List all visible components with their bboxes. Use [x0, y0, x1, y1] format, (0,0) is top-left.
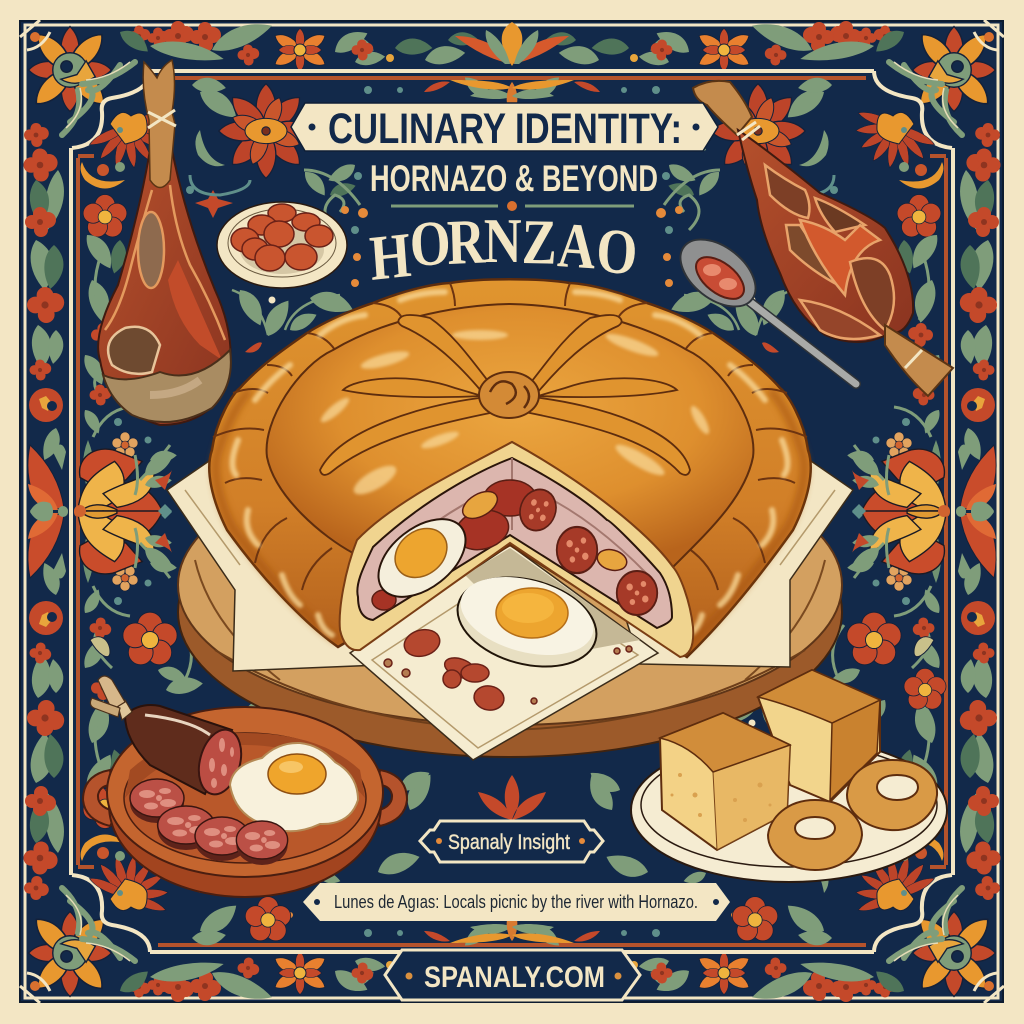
title banner: CULINARY IDENTITY: — [328, 105, 682, 153]
chorizo slices — [130, 779, 288, 865]
serving spoon with chorizo — [668, 226, 856, 384]
plate of chorizo slices — [217, 202, 347, 288]
fact banner — [303, 883, 730, 921]
halved egg on paper — [448, 563, 606, 681]
sausage slices in filling — [372, 480, 657, 615]
subtitle divider — [391, 201, 634, 211]
chorizo sausage — [90, 676, 248, 799]
pastry knot — [479, 372, 539, 418]
right cured ham — [693, 81, 953, 396]
pastry rings — [768, 760, 937, 870]
wooden board — [178, 445, 842, 757]
plate of bread and pastries — [631, 670, 947, 882]
main heading: HORNZAO — [367, 205, 639, 294]
pie crust rim — [209, 279, 811, 657]
parchment paper — [167, 450, 853, 760]
chorizo crumbs on paper — [384, 626, 632, 712]
pastry ridges — [320, 315, 690, 475]
clay dish with chorizo and fried egg — [83, 676, 407, 897]
fried egg — [230, 743, 358, 831]
pastry highlights — [318, 330, 712, 500]
sliced egg in filling — [364, 504, 480, 612]
website badge: SPANALY.COM — [424, 961, 605, 994]
front bread cube — [660, 713, 790, 850]
Spanaly Insight badge: Spanaly Insight — [448, 831, 570, 854]
hornazo pie — [209, 279, 811, 712]
pie top surface — [267, 304, 753, 567]
back bread cube — [758, 670, 880, 802]
left cured ham — [98, 60, 231, 425]
subtitle: HORNAZO & BEYOND — [370, 158, 658, 199]
cut cross-section — [340, 442, 693, 657]
Spanaly Insight badge — [420, 821, 603, 862]
website badge — [385, 950, 640, 1000]
fact banner: Lunes de Agıas: Locals picnic by the river with Hornazo. — [334, 892, 698, 912]
